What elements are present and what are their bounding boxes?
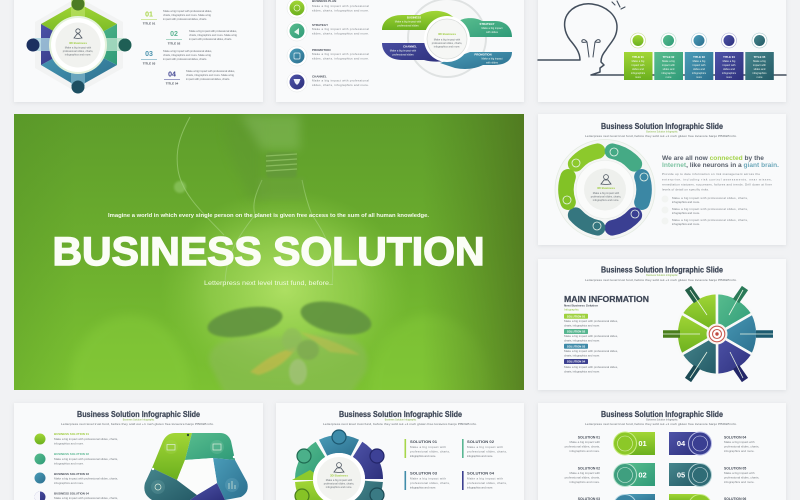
text block: main information: Next Business Solution	[564, 304, 598, 308]
step box 04: slides and	[723, 67, 735, 71]
solution 04 text: Make a big impact with	[724, 440, 755, 444]
step box 03: Make a big	[693, 59, 706, 63]
step 03: Make a big impact with professional slides,	[163, 49, 212, 53]
step 04: Make a big impact with professional slides,	[186, 69, 235, 73]
list item 01: Make a big impact with professional slides, charts,	[54, 437, 118, 441]
icons	[151, 440, 239, 494]
icon: people	[601, 175, 611, 184]
slide heading: Business Solution Infographic Slide	[601, 264, 723, 274]
text block: connected internet: Internet, like neurons in a giant brain.	[662, 162, 779, 169]
list item: promotion: PROMOTION	[312, 48, 330, 52]
photo: light bulb and hands	[174, 114, 374, 395]
step 02: impact with professional slides, charts.	[189, 37, 232, 41]
solution 02: professional slides, charts,	[467, 450, 507, 454]
icon: people	[334, 463, 344, 472]
tab 06	[669, 494, 712, 500]
step box 05	[745, 33, 774, 80]
solution 01 text: professional slides, charts,	[565, 444, 600, 448]
overlapping bands diagram: professional slides	[397, 24, 419, 28]
arrows	[663, 288, 773, 380]
solution 05 text	[724, 466, 760, 484]
solution 03: infographics and more.	[410, 486, 436, 490]
step box 04: infographics	[722, 71, 737, 75]
solution 02 text: SOLUTION 02	[578, 466, 600, 470]
list item: strategy	[287, 21, 369, 41]
text block: main information: MAIN INFORMATION	[564, 295, 649, 304]
tag green: charts, infographics and more.	[564, 324, 600, 328]
list item 03	[34, 472, 118, 485]
text block: connected internet: levels of detail on specific risks.	[662, 188, 709, 192]
hexagon diagram: Make a big impact with	[65, 46, 92, 50]
overlapping bands diagram: 3D Business	[438, 32, 456, 36]
bullet 2	[662, 206, 748, 215]
ring diagram	[292, 430, 384, 500]
overlapping bands diagram: professional slides	[392, 52, 414, 56]
list item: promotion: Make a big impact with professional	[312, 52, 369, 56]
step box 01: infographics	[631, 71, 646, 75]
tag green: Make a big impact with professional slides,	[564, 319, 618, 323]
step box 05: TITLE 05	[754, 55, 766, 59]
step box 04: Make a big	[723, 59, 736, 63]
panel: hexagon slide	[14, 0, 263, 102]
bullet 1	[662, 196, 748, 204]
slide heading	[585, 121, 737, 138]
hexagon diagram: professional slides, charts,	[63, 49, 94, 53]
list item: channel: Make a big impact with professional	[312, 78, 369, 82]
tab 04: 04	[677, 439, 686, 448]
step 01	[141, 9, 212, 26]
slide heading	[323, 409, 477, 426]
step box 05: more	[757, 75, 763, 79]
step box 04: impact with	[723, 63, 736, 67]
ring diagram: Make a big impact with	[593, 191, 620, 195]
step box 05: impact with	[753, 63, 767, 67]
solution 01: Make a big impact with	[410, 445, 446, 449]
overlapping bands diagram: Make a big impact	[481, 26, 503, 30]
tag teal: SOLUTION 02	[567, 330, 586, 334]
ring diagram: Make a big impact with	[326, 478, 353, 482]
step 01: charts, infographics and more. Make a big	[163, 13, 211, 17]
panel: overlapping bands slide	[276, 0, 524, 102]
list item 04	[34, 492, 118, 500]
list item 03: Make a big impact with professional slides, charts,	[54, 476, 118, 480]
solution 02 text	[565, 466, 600, 484]
panel: target and arrows slide	[538, 259, 786, 390]
step box 04	[715, 33, 744, 80]
tag green: SOLUTION 01	[567, 314, 586, 318]
tab 02	[614, 463, 655, 486]
panel: numbered tabs slide	[538, 403, 786, 500]
step box 02: impact with	[662, 63, 676, 67]
step box 01: slides and	[632, 67, 644, 71]
slide background	[276, 0, 524, 102]
solution 02: SOLUTION 02	[467, 440, 494, 444]
solution 03	[404, 471, 450, 490]
list item: promotion	[287, 46, 369, 66]
slide heading: Business Solution Infographic Slide	[77, 409, 200, 419]
list item 01: BUSINESS SOLUTION 01	[54, 432, 89, 436]
hexagon diagram: 3D Business	[69, 41, 87, 45]
bullet 1: infographics and more.	[672, 200, 700, 204]
solution 01 text: SOLUTION 01	[578, 436, 600, 440]
slide heading: Letterpress next level trust fund, before they sold out +1 meh gluten free locavore banjo PBR&B info.	[585, 278, 737, 282]
solution 02 text: infographics and more.	[569, 480, 600, 484]
step box 03	[685, 33, 713, 80]
step box 01: impact with	[632, 63, 645, 67]
tab 04	[669, 432, 712, 455]
slide heading: Letterpress next level trust fund, before they sold out +1 meh gluten free locavore banjo PBR&B info.	[585, 422, 737, 426]
list item 01	[34, 432, 118, 446]
overlapping bands diagram: Make a big impact with	[390, 48, 417, 52]
ring diagram	[555, 140, 655, 240]
ring diagram: professional slides, charts,	[591, 194, 622, 198]
solution 02	[462, 439, 507, 458]
slide heading: Letterpress next level trust fund, before they sold out +1 meh gluten free locavore banjo PBR&B info.	[323, 422, 477, 426]
overlapping bands diagram: PROMOTION	[474, 52, 492, 56]
bullseye	[707, 324, 727, 344]
step box 02: Make a big	[662, 59, 675, 63]
text block: connected internet: remediation statuses, successes, failures and trends. Drill down at finer	[662, 182, 772, 186]
step box 02	[654, 33, 683, 80]
bullet 1: Make a big impact with professional slides, charts,	[672, 196, 748, 200]
tag blue	[564, 344, 618, 358]
list item 04: Make a big impact with professional slides, charts,	[54, 496, 118, 500]
step box 03: TITLE 03	[693, 55, 705, 59]
tag navy: SOLUTION 04	[567, 360, 586, 364]
solution 05 text: SOLUTION 05	[724, 466, 746, 470]
solution 03: professional slides, charts,	[410, 481, 450, 485]
text block: connected internet: Provide up to date information on risk management across the	[662, 172, 760, 176]
slide background	[538, 259, 786, 390]
slide heading: Business Solution Infographic Slide	[339, 409, 462, 419]
solution 04: SOLUTION 04	[467, 472, 494, 476]
overlapping bands diagram: Make a big impact with	[434, 38, 461, 42]
step box 02: more	[666, 75, 672, 79]
pentagon diagram	[144, 433, 248, 500]
overlapping bands diagram: Make a big impact	[481, 56, 503, 60]
step box 01	[624, 33, 652, 80]
tag navy: Make a big impact with professional slides,	[564, 365, 618, 369]
solution 01 text	[565, 436, 600, 453]
tab 01: 01	[638, 439, 647, 448]
tag navy: charts, infographics and more.	[564, 370, 600, 374]
slide heading	[585, 409, 737, 426]
slide heading: Business Solution Infographic	[646, 418, 679, 422]
solution 02: Make a big impact with	[467, 445, 503, 449]
solution 05 text: professional slides, charts,	[724, 476, 760, 480]
hero background	[14, 114, 524, 390]
slide background	[538, 0, 786, 102]
text block: connected internet	[662, 155, 779, 192]
step box 05: Make a big	[753, 59, 766, 63]
overlapping bands diagram: STRATEGY	[479, 22, 495, 26]
step 03: TITLE 03	[143, 62, 156, 66]
slide heading: Business Solution Infographic Slide	[601, 409, 723, 419]
icon: light bulb head outline	[538, 1, 786, 75]
panel: pentagon slide	[14, 403, 263, 500]
tag teal	[564, 329, 618, 342]
overlapping bands diagram: with slides	[486, 30, 499, 34]
slide heading: Business Solution Infographic	[646, 274, 679, 277]
bullet 3: infographics and more.	[672, 222, 700, 226]
list item 02: BUSINESS SOLUTION 02	[54, 452, 89, 456]
solution 03: SOLUTION 03	[410, 472, 437, 476]
slide heading	[585, 264, 737, 282]
list item: green: Make a big impact with professional	[312, 4, 369, 8]
solution 03: Make a big impact with	[410, 476, 446, 480]
list item 04: BUSINESS SOLUTION 04	[54, 492, 89, 496]
list item: promotion: slides, charts, infographics and more.	[312, 56, 369, 60]
step 02: 02	[170, 31, 178, 38]
ring diagram: 3D Business	[330, 474, 348, 478]
tab 03	[614, 494, 655, 500]
step 04: charts, infographics and more. Make a big	[186, 73, 234, 77]
step 04: TITLE 04	[166, 82, 179, 86]
step box 02: TITLE 02	[663, 55, 675, 59]
slide background	[14, 403, 263, 500]
overlapping bands diagram: infographics and more.	[434, 44, 460, 48]
solution 05 text: infographics and more.	[724, 480, 755, 484]
step box 03: slides and	[693, 67, 705, 71]
overlapping bands diagram: with slides	[486, 60, 499, 64]
step 04	[164, 69, 235, 86]
text block: main information: Infographic	[564, 308, 579, 312]
tab 05	[669, 463, 712, 486]
solution 04 text: professional slides, charts,	[724, 444, 760, 448]
overlapping bands diagram: professional slides, charts,	[432, 41, 463, 45]
step 01: impact with professional slides, charts.	[163, 17, 207, 21]
tag teal: Make a big impact with professional slides,	[564, 334, 618, 338]
tag green	[564, 314, 618, 328]
ring diagram: professional slides, charts,	[324, 482, 355, 486]
panel: ring solutions slide	[276, 403, 524, 500]
tab 05: 05	[677, 470, 685, 480]
step 02	[166, 29, 237, 46]
text block: connected internet: enterprise, including risk control assessments, near misses,	[662, 178, 772, 182]
solution 01: SOLUTION 01	[410, 440, 437, 444]
tab 01	[614, 432, 655, 455]
list item: strategy: Make a big impact with professional	[312, 27, 369, 31]
solution 02 text: professional slides, charts,	[565, 476, 600, 480]
overlapping bands diagram	[382, 0, 512, 77]
step box 05: infographics	[752, 71, 767, 75]
list item 02: Make a big impact with professional slides, charts,	[54, 457, 118, 461]
solution 01	[404, 439, 450, 458]
solution 04 text: SOLUTION 04	[724, 436, 746, 440]
ring diagram: infographics and more.	[593, 198, 619, 202]
list item 02: infographics and more.	[54, 462, 84, 466]
slide background	[538, 114, 786, 245]
hero title: BUSINESS SOLUTION	[52, 230, 484, 274]
tab 02: 02	[638, 470, 647, 480]
list item: strategy: STRATEGY	[312, 23, 328, 27]
overlapping bands diagram: BUSINESS	[407, 16, 421, 20]
step 04: 04	[168, 72, 176, 78]
step 01: 01	[145, 12, 153, 18]
solution 01 text: Make a big impact with	[569, 440, 600, 444]
step box 04: more	[726, 75, 733, 79]
slide heading	[61, 409, 214, 426]
step box 04: TITLE 04	[723, 55, 735, 59]
bullet 2: infographics and more.	[672, 211, 700, 215]
solution 04: professional slides, charts,	[467, 481, 507, 485]
ring diagram: 3D Business	[597, 186, 615, 190]
step 03: impact with professional slides, charts.	[163, 57, 207, 61]
solution 02 text: Make a big impact with	[569, 471, 600, 475]
panel: hero title slide	[14, 114, 524, 390]
hero subtitle: Letterpress next level trust fund, before..	[204, 280, 333, 287]
overlapping bands diagram: CHANNEL	[403, 44, 417, 48]
slide heading: Business Solution Infographic Slide	[601, 121, 723, 131]
slide background	[538, 403, 786, 500]
solution 04: Make a big impact with	[467, 476, 503, 480]
icon: people	[74, 29, 82, 38]
bullet 3	[662, 218, 748, 226]
tag teal: charts, infographics and more.	[564, 338, 600, 342]
step box 05: slides and	[754, 67, 766, 71]
step box 02: infographics	[662, 71, 676, 75]
overlapping bands diagram: Make a big impact with	[395, 20, 422, 24]
step box 03: impact with	[693, 63, 706, 67]
list item 02	[34, 452, 118, 466]
list item: channel: slides, charts, infographics and more.	[312, 83, 369, 87]
text block: main information	[564, 295, 649, 374]
solution 01: infographics and more.	[410, 454, 436, 458]
step 02: charts, infographics and more. Make a big	[189, 33, 237, 37]
hexagon diagram	[26, 0, 132, 94]
panel: light bulb timeline slide	[538, 0, 786, 102]
step 02: Make a big impact with professional slides,	[189, 29, 237, 33]
bullet 3: Make a big impact with professional slides, charts,	[672, 218, 748, 222]
panel: circular segments slide	[538, 114, 786, 245]
step box 02: slides and	[663, 67, 675, 71]
step box 01: TITLE 01	[632, 55, 644, 59]
slide heading: Business Solution Infographic	[385, 418, 417, 422]
slide background	[276, 403, 524, 500]
solution 02: infographics and more.	[467, 454, 493, 458]
step 01: Make a big impact with professional slides,	[163, 9, 212, 13]
slide heading: Letterpress next level trust fund, before they sold out +1 meh gluten free locavore banjo PBR&B info.	[585, 134, 737, 138]
step 01: TITLE 01	[143, 22, 156, 26]
tag blue: Make a big impact with professional slides,	[564, 349, 618, 353]
step box 03: more	[696, 75, 703, 79]
step box 01: more	[635, 75, 642, 79]
solution 04	[462, 471, 507, 490]
list item: channel	[287, 72, 369, 92]
step 03: 03	[145, 51, 153, 58]
solution 01: professional slides, charts,	[410, 450, 450, 454]
tag navy	[564, 359, 618, 374]
tag blue: SOLUTION 03	[567, 344, 586, 348]
step 02: TITLE 02	[168, 42, 181, 46]
bullet 2: Make a big impact with professional slides, charts,	[672, 207, 748, 211]
list item: channel: CHANNEL	[312, 74, 327, 78]
step 04: impact with professional slides, charts.	[186, 77, 230, 81]
list item 01: infographics and more.	[54, 442, 84, 446]
step 03: charts, infographics and more. Make a big	[163, 53, 211, 57]
slide background	[14, 0, 263, 102]
solution 04 text	[724, 436, 760, 453]
text block: connected internet: We are all now connected by the	[662, 155, 764, 162]
solution 05 text: Make a big impact with	[724, 471, 755, 475]
slide heading: Letterpress next level trust fund, before they sold out +1 meh gluten free locavore banjo PBR&B info.	[61, 422, 214, 426]
ring diagram: infographics and more.	[326, 485, 352, 489]
list item 03: infographics and more.	[54, 481, 84, 485]
list item 03: BUSINESS SOLUTION 03	[54, 472, 89, 476]
target chart	[663, 288, 773, 380]
list item: green: slides, charts, infographics and more.	[312, 8, 369, 12]
solution 04 text: infographics and more.	[724, 449, 755, 453]
step box 03: infographics	[692, 71, 707, 75]
slide heading: Business Solution Infographic	[123, 418, 155, 422]
step 03	[141, 49, 212, 66]
solution 04: infographics and more.	[467, 486, 493, 490]
hero tagline: Imagine a world in which every single person on the planet is given free access to the sum of all human knowledge.	[108, 213, 430, 219]
hexagon diagram: infographics and more.	[65, 52, 91, 56]
slide heading: Business Solution Infographic	[646, 130, 679, 134]
list item: green	[287, 0, 369, 18]
solution 01 text: infographics and more.	[569, 449, 600, 453]
tag blue: charts, infographics and more.	[564, 354, 600, 358]
step box 01: Make a big	[632, 59, 645, 63]
list item: strategy: slides, charts, infographics and more.	[312, 32, 369, 36]
